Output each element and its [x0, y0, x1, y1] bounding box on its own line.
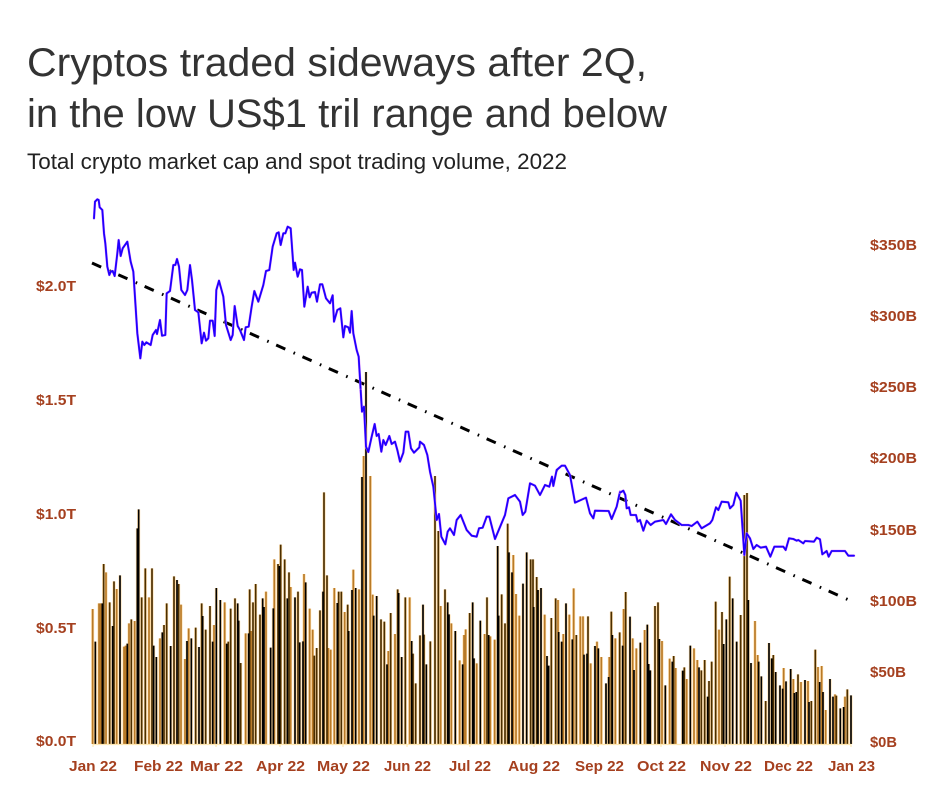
left axis: market cap: $2.0T — [36, 278, 76, 295]
right axis: trading volume: $300B — [870, 308, 917, 325]
left axis: market cap: $0.5T — [36, 620, 76, 637]
x axis: months: Jan 23 — [828, 758, 875, 775]
x axis: months: Nov 22 — [700, 758, 752, 775]
title — [27, 41, 667, 136]
right axis: trading volume — [870, 237, 917, 751]
right axis: trading volume: $150B — [870, 522, 917, 539]
right axis: trading volume: $350B — [870, 237, 917, 254]
left axis: market cap: $1.0T — [36, 506, 76, 523]
x axis: months: Aug 22 — [508, 758, 560, 775]
bar chart: spot trading volume — [93, 372, 851, 747]
left axis: market cap: $0.0T — [36, 733, 76, 750]
x axis: months: Dec 22 — [764, 758, 813, 775]
x axis: months: Jul 22 — [449, 758, 491, 775]
subtitle: Total crypto market cap and spot trading volume, 2022 — [27, 149, 567, 174]
x axis: months: Mar 22 — [190, 758, 243, 775]
right axis: trading volume: $0B — [870, 734, 897, 751]
x axis: months: Oct 22 — [637, 758, 686, 775]
x axis: months: Sep 22 — [575, 758, 624, 775]
right axis: trading volume: $50B — [870, 664, 906, 681]
line chart: total crypto market cap — [94, 199, 854, 557]
right axis: trading volume: $250B — [870, 379, 917, 396]
x axis: months: May 22 — [317, 758, 370, 775]
x axis: months: Jun 22 — [384, 758, 431, 775]
x axis: months: Apr 22 — [256, 758, 305, 775]
title: in the low US$1 tril range and below — [27, 92, 667, 136]
x axis: months: Feb 22 — [134, 758, 183, 775]
left axis: market cap — [36, 278, 76, 750]
left axis: market cap: $1.5T — [36, 392, 76, 409]
right axis: trading volume: $100B — [870, 593, 917, 610]
x axis: months: Jan 22 — [69, 758, 117, 775]
x axis: months — [69, 758, 875, 775]
right axis: trading volume: $200B — [870, 450, 917, 467]
trend line — [92, 263, 851, 601]
title: Cryptos traded sideways after 2Q, — [27, 41, 647, 85]
